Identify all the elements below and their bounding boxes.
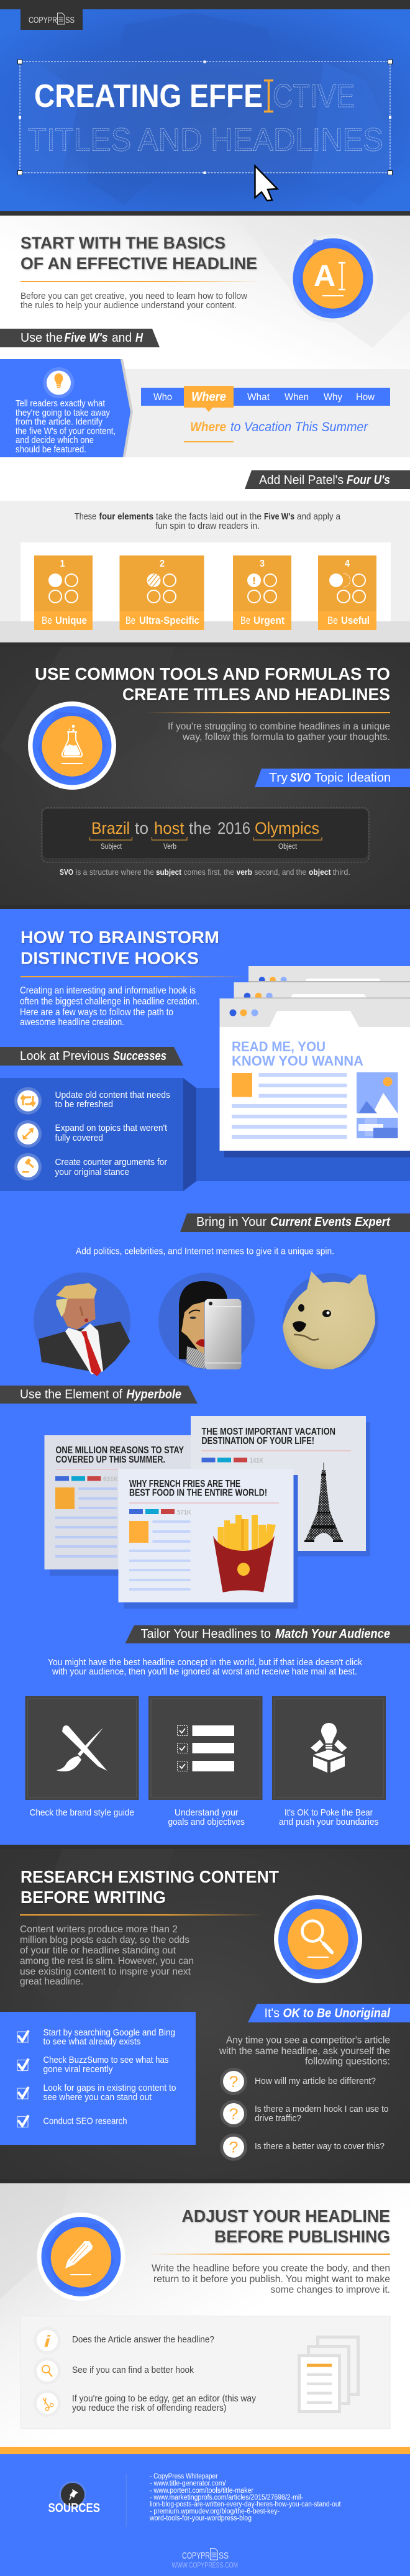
intro text xyxy=(20,1924,194,1987)
card 3: be urgent: Urgent xyxy=(253,614,285,626)
ribbon: current events: Current Events Expert xyxy=(270,1215,391,1229)
question 1: How will my article be different? xyxy=(255,2076,376,2086)
card: french fries xyxy=(118,1469,298,1609)
icon: french fries xyxy=(213,1515,276,1592)
footer logo: SS xyxy=(219,2551,229,2561)
panel: tell readers: should be featured. xyxy=(16,444,86,455)
question 2: drive traffic? xyxy=(255,2113,301,2124)
SVO caption xyxy=(60,867,350,877)
hero section xyxy=(0,0,410,216)
example headline: to Vacation This Summer xyxy=(230,420,368,434)
card 1: be unique: Be xyxy=(42,614,52,626)
item: expand on topics: fully covered xyxy=(55,1133,103,1143)
card 2: be ultra-specific: 2 xyxy=(160,559,165,569)
panel: tell readers: from the article. Identify xyxy=(16,417,102,427)
item: better hook xyxy=(34,2357,194,2385)
intro text: Content writers produce more than 2 xyxy=(20,1924,178,1935)
SVO example box: Brazil xyxy=(91,819,130,838)
source list: - www.portent.com/tools/title-maker xyxy=(150,2487,253,2495)
footer logo xyxy=(171,2549,238,2570)
heading: RESEARCH EXISTING CONTENT xyxy=(20,1867,279,1886)
card: french fries: 571K xyxy=(177,1509,191,1516)
ribbon: four Us: Add Neil Patel's xyxy=(259,473,344,487)
example headline: Where xyxy=(190,420,226,434)
item: gaps xyxy=(17,2083,176,2103)
audience text: You might have the best headline concept in the world, but if that idea doesn't click xyxy=(48,1657,362,1668)
SVO caption: is a structure where the xyxy=(76,867,154,877)
competitor text xyxy=(219,2035,390,2067)
question 1: ? xyxy=(229,2073,239,2091)
panel: tell readers: Tell readers exactly what xyxy=(16,398,106,409)
item: gaps: see where you can stand out xyxy=(43,2092,152,2103)
item: get an editor: If you're going to be edgy, get an editor (this way xyxy=(72,2393,256,2404)
source list: lion-blog-posts-are-written-every-day-heres-how-you-can-stand-out xyxy=(150,2501,341,2508)
card 2: be ultra-specific xyxy=(119,555,204,630)
heading: CREATE TITLES AND HEADLINES xyxy=(122,685,390,704)
item: better hook: See if you can find a better hook xyxy=(72,2365,194,2375)
intro text: among the rest is slim. However, you can xyxy=(20,1956,194,1966)
panel: tell readers xyxy=(0,359,133,469)
section: research content xyxy=(0,1845,410,2183)
heading: ADJUST YOUR HEADLINE xyxy=(181,2206,390,2226)
item: counter arguments: your original stance xyxy=(55,1167,129,1177)
panel: research checklist xyxy=(0,2012,196,2145)
competitor text: following questions: xyxy=(305,2057,390,2067)
card 4: be useful xyxy=(318,555,376,630)
item: answer the headline: i xyxy=(44,2332,51,2350)
box: goals and objectives xyxy=(148,1696,262,1827)
box: goals and objectives: Understand your xyxy=(175,1807,239,1818)
ribbon: previous successes xyxy=(0,1047,183,1066)
middle browser xyxy=(234,982,410,1001)
card 3: be urgent: Be xyxy=(240,614,250,626)
four Us intro text: These xyxy=(75,511,96,522)
ribbon: current events xyxy=(180,1213,410,1232)
question 1 xyxy=(220,2068,376,2095)
icon: magnifier badge xyxy=(274,1895,362,1983)
title xyxy=(28,78,383,158)
intro text: If you're struggling to combine headlines in a unique xyxy=(168,721,390,732)
question 3 xyxy=(220,2134,385,2161)
card: vacation destination: THE MOST IMPORTANT VACATION xyxy=(201,1427,335,1437)
section: adjust headline xyxy=(0,2183,410,2447)
SVO caption: object xyxy=(309,867,331,877)
back browser xyxy=(248,966,410,991)
ribbon: SVO: SVO xyxy=(290,771,311,785)
intro text xyxy=(168,721,390,742)
example headline xyxy=(184,420,368,442)
SVO example box: Verb xyxy=(163,843,176,851)
intro text: the rules to help your audience understand your content. xyxy=(20,300,237,311)
box: poke the bear: and push your boundaries xyxy=(279,1817,379,1827)
section: four Us xyxy=(0,457,410,642)
intro text: some changes to improve it. xyxy=(271,2285,390,2295)
section: footer xyxy=(0,2447,410,2576)
icon: AI cursor badge: A xyxy=(314,260,335,293)
heading xyxy=(35,664,390,704)
intro text xyxy=(20,985,199,1028)
ribbon: five Ws xyxy=(0,329,160,347)
card: vacation destination: 141K xyxy=(250,1457,263,1464)
card 1: be unique: Unique xyxy=(55,614,87,626)
intro text: of your title or headline standing out xyxy=(20,1945,176,1956)
ribbon: SVO: Topic Ideation xyxy=(314,771,391,785)
card 1: be unique: 1 xyxy=(60,559,65,569)
heading: USE COMMON TOOLS AND FORMULAS TO xyxy=(35,664,390,683)
front browser: KNOW YOU WANNA xyxy=(232,1053,363,1069)
intro text: million blog posts each day, so the odds xyxy=(20,1935,189,1945)
source list: - premium.wpmudev.org/blog/the-6-best-key- xyxy=(150,2508,280,2515)
competitor text: with the same headline, ask yourself the xyxy=(219,2046,390,2057)
card: french fries: WHY FRENCH FRIES ARE THE xyxy=(129,1479,240,1489)
intro text: often the biggest challenge in headline creation. xyxy=(20,997,199,1007)
article cards xyxy=(45,1416,370,1609)
heading: START WITH THE BASICS xyxy=(20,234,226,252)
item: buzzsumo: Check BuzzSumo to see what has xyxy=(43,2055,169,2065)
heading xyxy=(20,234,257,273)
tab bar: How xyxy=(356,392,375,403)
intro text xyxy=(20,291,247,311)
tab bar: Where xyxy=(191,390,226,404)
text caret xyxy=(264,81,273,112)
section: tools and formulas xyxy=(0,642,410,909)
item: update old content xyxy=(14,1087,170,1115)
SVO caption: verb xyxy=(236,867,252,877)
logo: COPYPR xyxy=(29,15,57,25)
SVO example box: Olympics xyxy=(255,819,319,838)
item: get an editor xyxy=(34,2390,256,2417)
section: basics xyxy=(0,216,410,469)
ribbon: five Ws: Use the xyxy=(20,331,63,345)
item: search engines: Start by searching Google and Bing xyxy=(43,2027,175,2038)
card 3: be urgent xyxy=(233,555,291,630)
ribbon: SVO: Try xyxy=(269,771,288,785)
item: expand on topics: Expand on topics that weren't xyxy=(55,1123,168,1133)
intro text: awesome headline creation. xyxy=(20,1017,124,1028)
SVO example box: Object xyxy=(278,843,298,851)
front browser: READ ME, YOU xyxy=(232,1039,326,1054)
audience text: with your audience, then you'll be ignored at worst and receive hate mail at best. xyxy=(52,1666,357,1677)
card 1: be unique xyxy=(34,555,93,630)
intro text: return to it before you publish. You might want to make xyxy=(153,2274,390,2285)
card: vacation destination xyxy=(191,1416,370,1556)
panel: tell readers: they're going to take away xyxy=(16,408,110,418)
card 2: be ultra-specific: Be xyxy=(125,614,135,626)
ribbon: match audience: Tailor Your Headlines to xyxy=(140,1627,271,1641)
icon: document stack xyxy=(299,2337,358,2412)
four Us intro text: take the facts laid out in the xyxy=(156,511,262,522)
heading: OF AN EFFECTIVE HEADLINE xyxy=(20,254,257,273)
example band xyxy=(118,369,410,457)
avatar: phone selfie xyxy=(158,1272,255,1369)
intro text: Write the headline before you create the body, and then xyxy=(152,2263,390,2274)
card 2: be ultra-specific: Ultra-Specific xyxy=(139,614,199,626)
SVO caption: second, and the xyxy=(255,867,306,877)
tab bar: When xyxy=(285,392,309,403)
item: answer the headline xyxy=(34,2327,214,2354)
avatar: politician xyxy=(34,1272,130,1376)
ribbon: SVO xyxy=(255,769,410,787)
band behind lists xyxy=(196,1088,410,1181)
box: goals and objectives: goals and objectives xyxy=(168,1817,245,1827)
heading: DISTINCTIVE HOOKS xyxy=(20,949,199,968)
icon: checklist xyxy=(178,1725,234,1771)
tab bar: Why xyxy=(324,392,342,403)
ribbon: hyperbole: Use the Element of xyxy=(20,1388,122,1402)
panel: tell readers: and decide which one xyxy=(16,435,94,445)
item: search engines: to see what already exists xyxy=(43,2037,140,2047)
box: poke the bear: It's OK to Poke the Bear xyxy=(285,1807,373,1818)
four Us intro text: four elements xyxy=(99,511,153,522)
title: CTIVE xyxy=(273,78,355,114)
item: expand on topics xyxy=(14,1120,168,1148)
audience text xyxy=(48,1657,362,1677)
question 3: Is there a better way to cover this? xyxy=(255,2141,385,2152)
ribbon: five Ws: Five W's xyxy=(65,331,108,345)
heading: BEFORE WRITING xyxy=(20,1888,166,1907)
icon: flask badge xyxy=(28,701,116,790)
heading xyxy=(20,1867,279,1907)
card 3: be urgent: 3 xyxy=(260,559,265,569)
item: buzzsumo xyxy=(17,2055,169,2075)
question 2 xyxy=(220,2100,389,2127)
heading: BEFORE PUBLISHING xyxy=(214,2227,390,2246)
item: gaps: Look for gaps in existing content to xyxy=(43,2083,176,2093)
four Us intro text: Five W's xyxy=(264,511,294,522)
panel: tell readers: the five W's of your content, xyxy=(16,426,116,436)
card 4: be useful: Be xyxy=(327,614,338,626)
item: get an editor: you reduce the risk of offending readers) xyxy=(72,2403,226,2413)
SVO example box: the xyxy=(189,819,211,838)
icon: lightbulb xyxy=(43,367,75,398)
four Us intro text: fun spin to draw readers in. xyxy=(155,521,260,531)
panel: previous successes list xyxy=(0,1078,196,1191)
SVO caption: SVO xyxy=(60,867,73,877)
ribbon: four Us: Four U's xyxy=(347,473,390,487)
intro text: Here are a few ways to follow the path to xyxy=(20,1007,173,1018)
item: answer the headline: Does the Article answer the headline? xyxy=(72,2334,214,2345)
SVO example box: to xyxy=(135,819,148,838)
item: counter arguments: Create counter arguments for xyxy=(55,1157,167,1167)
section: brainstorm hooks xyxy=(0,909,410,1845)
question 2: Is there a modern hook I can use to xyxy=(255,2104,389,2114)
intro text: way, follow this formula to gather your thoughts. xyxy=(182,732,390,742)
ribbon: match audience: Match Your Audience xyxy=(275,1627,390,1641)
source list: - CopyPress Whitepaper xyxy=(150,2473,218,2480)
box: brand style guide xyxy=(25,1696,139,1818)
box: brand style guide: Check the brand style guide xyxy=(30,1807,134,1818)
ribbon: hyperbole: Hyperbole xyxy=(127,1388,181,1402)
source list: - www.title-generator.com/ xyxy=(150,2480,226,2488)
heading xyxy=(181,2206,390,2246)
intro text: Creating an interesting and informative hook is xyxy=(20,985,196,996)
icon: pencil and brush xyxy=(56,1725,107,1771)
ribbon: five Ws: H xyxy=(135,331,143,345)
card: french fries: BEST FOOD IN THE ENTIRE WORLD! xyxy=(129,1487,267,1499)
ribbon: unoriginal: OK to Be Unoriginal xyxy=(283,2007,390,2021)
card 4: be useful: 4 xyxy=(345,559,350,569)
intro text: use existing content to inspire your next xyxy=(20,1966,191,1977)
icon: AI cursor badge xyxy=(289,234,377,322)
source list xyxy=(149,2473,341,2523)
SVO example box: host xyxy=(154,819,184,838)
title: CREATING EFFE xyxy=(34,78,263,114)
front browser shadow xyxy=(224,1151,410,1157)
ribbon: previous successes: Look at Previous xyxy=(20,1049,109,1063)
ribbon: four Us xyxy=(245,470,410,489)
icon: pushpin xyxy=(59,2481,86,2508)
four Us intro text xyxy=(75,511,341,531)
source list: - www.marketingprofs.com/articles/2015/27698/2-mil- xyxy=(150,2494,303,2501)
ribbon: five Ws: and xyxy=(112,331,132,345)
logo xyxy=(20,9,83,30)
item: update old content: to be refreshed xyxy=(55,1099,113,1110)
question 2: ? xyxy=(229,2106,239,2123)
item: SEO research: Conduct SEO research xyxy=(43,2116,127,2127)
SVO example box xyxy=(42,808,369,862)
card: one million reasons: ONE MILLION REASONS TO STAY xyxy=(56,1445,184,1456)
item: SEO research xyxy=(17,2115,127,2127)
competitor text: Any time you see a competitor's article xyxy=(226,2035,390,2046)
heading: HOW TO BRAINSTORM xyxy=(20,928,219,947)
ribbon: current events: Bring in Your xyxy=(196,1215,266,1229)
card: one million reasons: COVERED UP THIS SUMMER. xyxy=(56,1455,165,1465)
source list: word-tools-for-your-wordpress-blog xyxy=(149,2515,252,2523)
four Us intro text: and apply a xyxy=(297,511,341,522)
icon: eiffel tower xyxy=(304,1463,343,1542)
footer logo: WWW.COPYPRESS.COM xyxy=(171,2562,238,2570)
title: TITLES AND HEADLINES xyxy=(28,122,383,158)
icon: pencil badge xyxy=(37,2213,125,2301)
card 4: be useful: Useful xyxy=(341,614,370,626)
SVO caption: comes first, the xyxy=(184,867,234,877)
item: buzzsumo: gone viral recently xyxy=(43,2064,113,2075)
tab bar: What xyxy=(247,392,270,403)
ribbon: unoriginal xyxy=(248,2004,410,2022)
browser windows xyxy=(220,966,410,1157)
card: one million reasons xyxy=(45,1435,220,1576)
footer logo: COPYPR xyxy=(182,2551,210,2561)
SVO example box: 2016 xyxy=(217,819,250,838)
question 3: ? xyxy=(229,2139,239,2157)
panel: editing checklist xyxy=(21,2316,390,2429)
intro text: great headline. xyxy=(20,1976,83,1987)
front browser xyxy=(220,998,410,1151)
ribbon: previous successes: Successes xyxy=(113,1049,166,1063)
SVO caption: subject xyxy=(156,867,182,877)
heading xyxy=(20,928,219,968)
card: vacation destination: DESTINATION OF YOUR LIFE! xyxy=(201,1436,314,1446)
tab bar xyxy=(141,386,390,412)
avatar: doge xyxy=(283,1271,378,1369)
tab bar: Who xyxy=(153,392,172,403)
icon: idea box xyxy=(311,1723,347,1773)
SVO example box: Subject xyxy=(101,843,122,851)
logo: SS xyxy=(65,15,75,25)
current events text: Add politics, celebrities, and Internet memes to give it a unique spin. xyxy=(76,1246,334,1257)
ribbon: match audience xyxy=(125,1625,410,1643)
item: search engines xyxy=(17,2027,175,2047)
SVO caption: third. xyxy=(333,867,350,877)
intro text xyxy=(152,2263,390,2295)
box: poke the bear xyxy=(272,1696,386,1827)
ribbon: hyperbole xyxy=(0,1386,198,1404)
sources label: SOURCES xyxy=(48,2501,100,2515)
item: update old content: Update old content that needs xyxy=(55,1090,170,1100)
card: one million reasons: 631K xyxy=(103,1476,118,1483)
mouse cursor xyxy=(255,166,277,201)
intro text: Before you can get creative, you need to learn how to follow xyxy=(20,291,247,301)
item: counter arguments xyxy=(14,1153,167,1181)
ribbon: unoriginal: It's xyxy=(265,2007,280,2021)
selection box xyxy=(17,60,393,175)
